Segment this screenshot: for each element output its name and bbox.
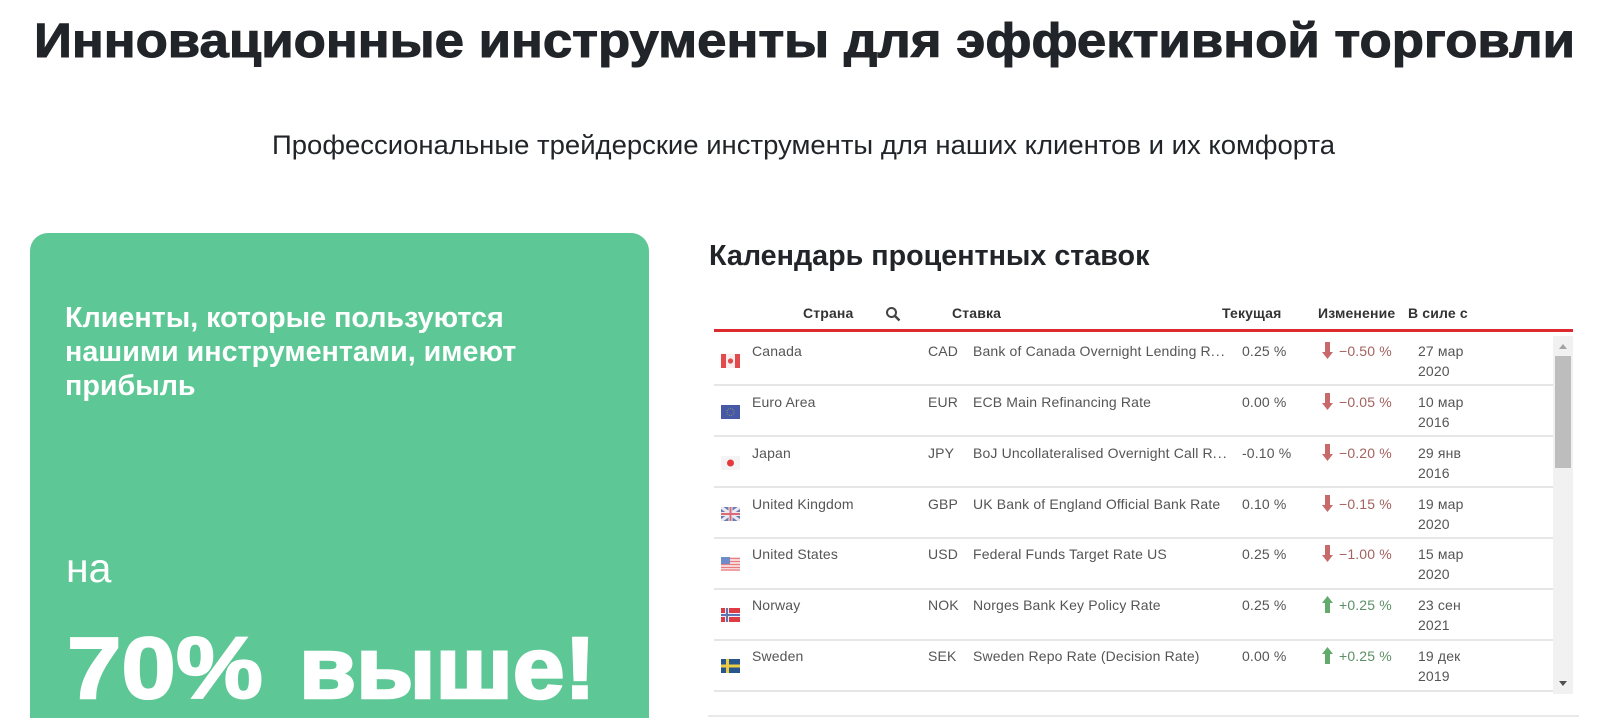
bottom divider [708,715,1579,717]
subtitle: Профессиональные трейдерские инструменты для наших клиентов и их комфорта [272,130,1335,160]
row: United States: −1.00 % [1339,546,1392,562]
row: Canada [721,342,1464,379]
row: United States: 2020 [1418,566,1450,582]
promo prefix: на [66,545,111,591]
row: Norway: 2021 [1418,617,1450,633]
row: Canada: −0.50 % [1339,343,1392,359]
row: Canada: CAD [928,343,958,359]
row: Japan: −0.20 % [1339,445,1392,461]
row: Sweden: 0.00 % [1242,648,1286,664]
row: Euro Area: ECB Main Refinancing Rate [973,394,1151,410]
row: Euro Area: 2016 [1418,414,1450,430]
row: Euro Area [721,393,1464,430]
row: Sweden: Sweden Repo Rate (Decision Rate) [973,648,1200,664]
row: Japan [721,444,1461,481]
row: United States [721,545,1464,582]
title: Инновационные инструменты для эффективной торговли [34,15,1575,68]
promo big number [67,620,596,717]
scrollbar up arrow [1559,344,1567,349]
row: United Kingdom: United Kingdom [752,496,854,512]
row: United States: United States [752,546,838,562]
header labels: Изменение [1318,305,1395,321]
arrow: down [1322,342,1333,359]
table header [714,305,1573,332]
row: Euro Area: −0.05 % [1339,394,1392,410]
header labels [803,305,1468,321]
row: United Kingdom: 19 мар [1418,496,1464,512]
header labels: Ставка [952,305,1001,321]
promo text [65,302,516,402]
row: United States: 0.25 % [1242,546,1286,562]
header red rule [714,328,1573,332]
row: Norway: NOK [928,597,959,613]
row: Sweden [721,647,1460,684]
flag: Sweden [721,659,740,673]
header labels: Текущая [1222,305,1281,321]
row: Japan: JPY [928,445,954,461]
header labels: Страна [803,305,853,321]
panel: green promo [30,233,649,718]
row: United Kingdom: GBP [928,496,958,512]
row: Sweden: SEK [928,648,956,664]
row: United Kingdom: 2020 [1418,516,1450,532]
row: Norway: Norges Bank Key Policy Rate [973,597,1161,613]
row: Sweden: Sweden [752,648,804,664]
arrow: down [1322,495,1333,512]
scrollbar [1553,336,1573,694]
flag: Canada [721,354,740,368]
row: Euro Area: Euro Area [752,394,816,410]
row: Norway: 23 сен [1418,597,1461,613]
arrow: up [1322,647,1333,664]
row: United States: Federal Funds Target Rate US [973,546,1167,562]
flag: Japan [721,456,740,470]
row: Norway: Norway [752,597,800,613]
row: Canada: 27 мар [1418,343,1464,359]
flag: US [721,557,740,571]
row: Norway [721,596,1461,633]
flag: EU [721,405,740,419]
scrollbar down arrow [1559,681,1567,686]
promo big number: 70% [67,620,263,717]
row: Japan: Japan [752,445,791,461]
flag: Norway [721,608,740,622]
row: United Kingdom: −0.15 % [1339,496,1392,512]
arrow: down [1322,393,1333,410]
arrow: down [1322,444,1333,461]
row: Sweden: 2019 [1418,668,1450,684]
promo text: нашими инструментами, имеют [65,336,516,368]
row: United States: USD [928,546,958,562]
row: Euro Area: 10 мар [1418,394,1464,410]
row: Sweden: +0.25 % [1339,648,1392,664]
row: Euro Area: 0.00 % [1242,394,1286,410]
arrow: down [1322,545,1333,562]
row: Japan: 29 янв [1418,445,1461,461]
scrollbar thumb [1555,356,1571,468]
row: Canada: 0.25 % [1242,343,1286,359]
promo text: прибыль [65,370,196,402]
row: Norway: 0.25 % [1242,597,1286,613]
arrow: up [1322,596,1333,613]
promo text: Клиенты, которые пользуются [65,302,504,334]
row: United Kingdom: UK Bank of England Official Bank Rate [973,496,1220,512]
row: Canada: 2020 [1418,363,1450,379]
table body [714,342,1553,692]
row: Japan: BoJ Uncollateralised Overnight Call R... [973,445,1228,461]
row: Canada: Bank of Canada Overnight Lending R... [973,343,1226,359]
row: Sweden: 19 дек [1418,648,1460,664]
promo big number: выше! [299,620,596,717]
row: United Kingdom: 0.10 % [1242,496,1286,512]
header labels: В силе с [1408,305,1468,321]
row: United States: 15 мар [1418,546,1464,562]
row: Japan: -0.10 % [1242,445,1291,461]
row: Euro Area: EUR [928,394,958,410]
row: Norway: +0.25 % [1339,597,1392,613]
row: Japan: 2016 [1418,465,1450,481]
row: United Kingdom [721,495,1464,532]
icon: search [886,307,900,322]
calendar heading: Календарь процентных ставок [709,240,1149,272]
flag: UK [721,507,740,521]
row: Canada: Canada [752,343,802,359]
